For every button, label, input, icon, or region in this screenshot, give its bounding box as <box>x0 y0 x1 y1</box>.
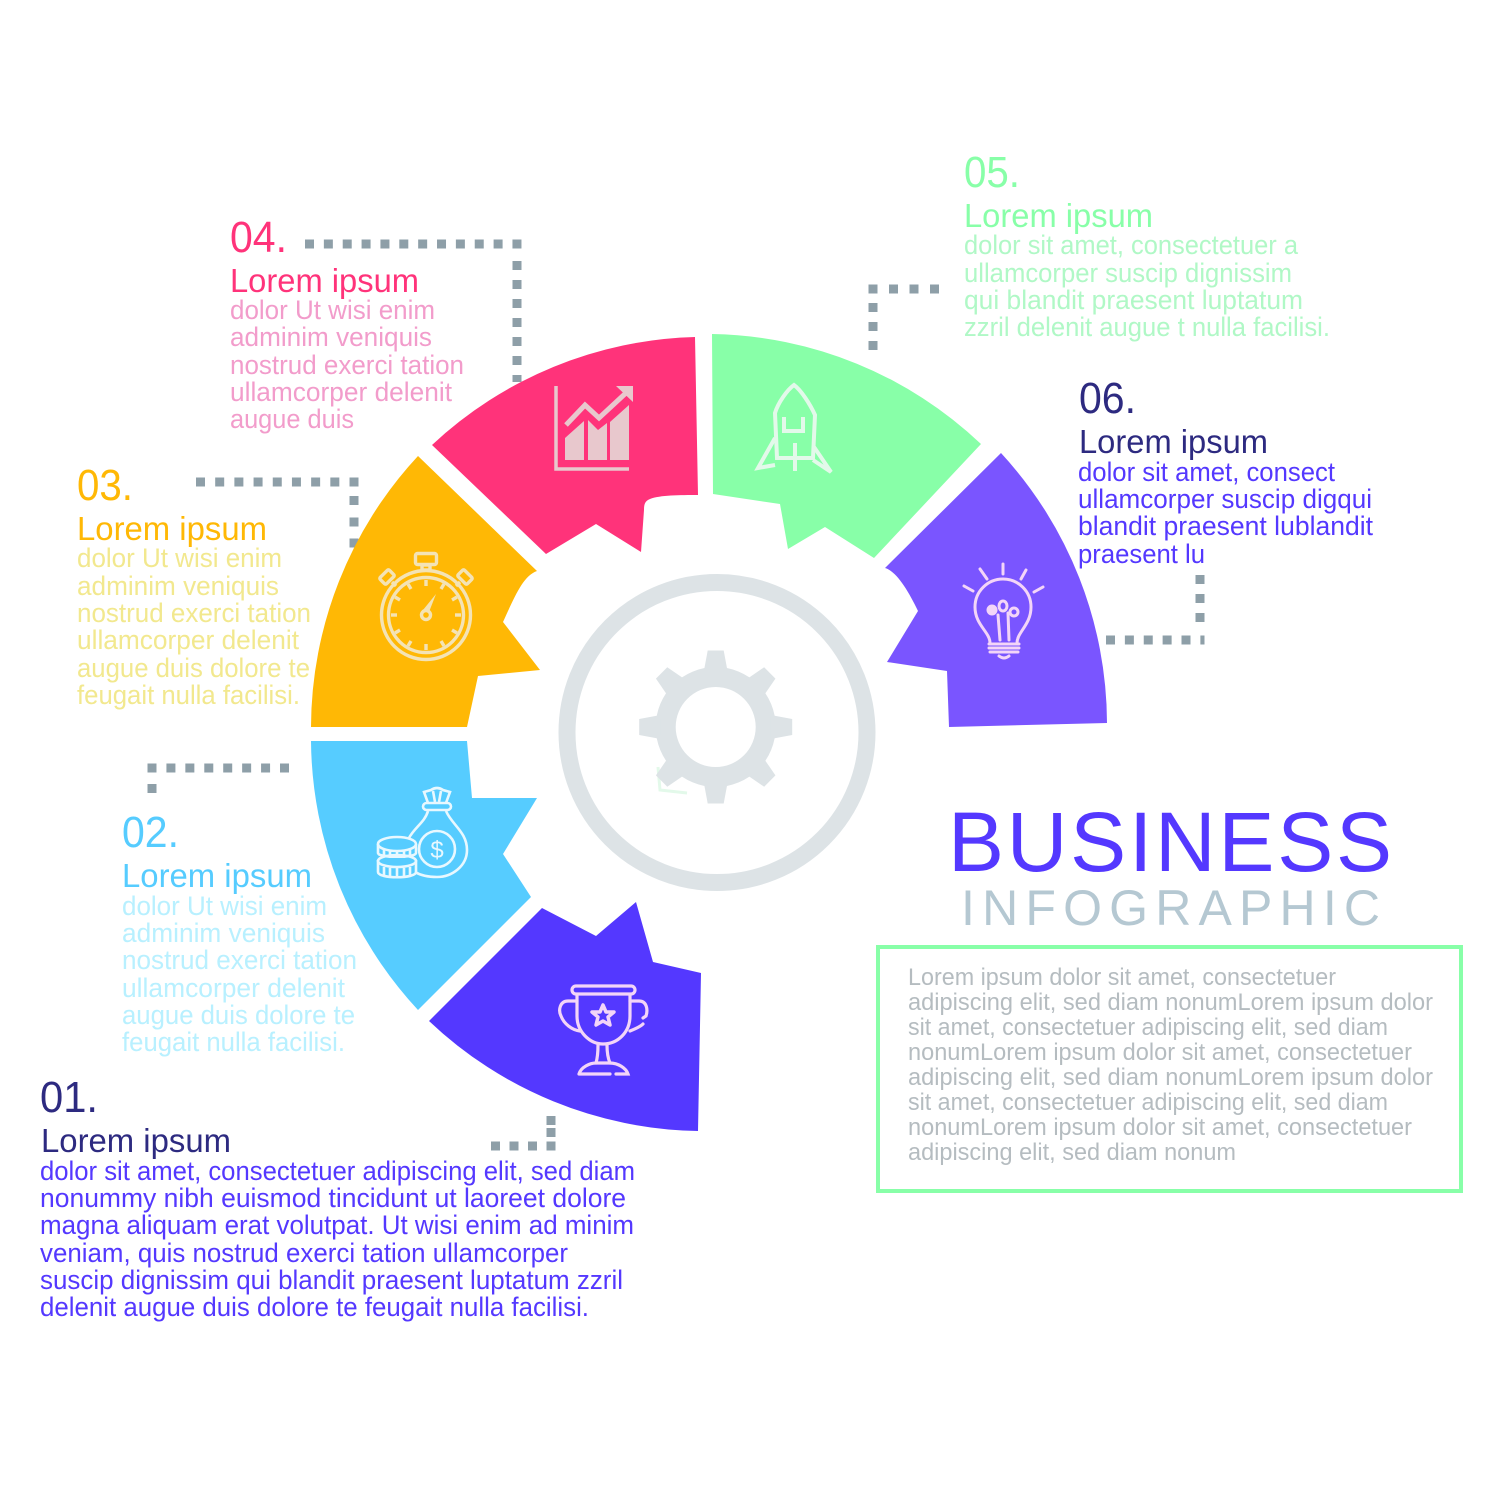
connector: 01 <box>491 1116 556 1146</box>
text block 02: feugait nulla facilisi. <box>122 1027 345 1057</box>
text block 01: delenit augue duis dolore te feugait nulla facilisi. <box>40 1292 589 1322</box>
text block 01: Lorem ipsum <box>41 1122 231 1159</box>
panel: description box: adipiscing elit, sed diam nonum <box>908 1139 1236 1166</box>
text block 04: dolor Ut wisi enim <box>230 295 435 325</box>
text block 06: Lorem ipsum <box>1079 423 1268 460</box>
panel: description box: nonumLorem ipsum dolor sit amet, consectetuer <box>908 1114 1412 1141</box>
text block 02: ullamcorper delenit <box>122 973 345 1003</box>
text block 06: ullamcorper suscip digqui <box>1078 484 1372 514</box>
segment 01: indigo <box>429 902 701 1131</box>
segment 05: mint <box>712 334 981 558</box>
text block 05: ullamcorper suscip dignissim <box>964 258 1292 288</box>
connector: 05 <box>868 289 939 350</box>
text block 04: augue duis <box>230 404 354 434</box>
title: BUSINESS <box>948 795 1392 889</box>
icon: center gear <box>639 650 792 804</box>
small mint mark <box>658 767 687 793</box>
connector: 03 <box>196 482 358 548</box>
text block 01: 01. <box>40 1073 98 1122</box>
text block 05: zzril delenit augue t nulla facilisi. <box>964 312 1330 342</box>
panel: description box: sit amet, consectetuer adipiscing elit, sed diam <box>908 1089 1388 1116</box>
text block 06: dolor sit amet, consect <box>1078 457 1335 487</box>
text block 03: dolor Ut wisi enim <box>77 543 282 573</box>
text block 04: Lorem ipsum <box>230 262 419 299</box>
text block 02: Lorem ipsum <box>122 857 312 894</box>
text block 01: dolor sit amet, consectetuer adipiscing elit, sed diam <box>40 1156 635 1186</box>
text block 05: qui blandit praesent luptatum <box>964 285 1303 315</box>
text block 03: augue duis dolore te <box>77 653 310 683</box>
panel: description box: adipiscing elit, sed diam nonumLorem ipsum dolor <box>908 1064 1433 1091</box>
segment 04: pink <box>432 337 698 554</box>
icon: stopwatch <box>379 554 473 660</box>
text block 01 <box>40 1073 635 1322</box>
text block 03: nostrud exerci tation <box>77 598 311 628</box>
text block 05: dolor sit amet, consectetuer a <box>964 230 1299 260</box>
icon: money bag and coins: $ <box>430 837 444 864</box>
text block 01: veniam, quis nostrud exerci tation ullamcorper <box>40 1238 568 1268</box>
text block 02: adminim veniquis <box>122 918 325 948</box>
connector: 06 <box>1106 575 1204 640</box>
segment 03: amber <box>311 456 540 727</box>
text block 05 <box>964 148 1330 342</box>
text block 02 <box>122 808 357 1057</box>
text block 04: adminim veniquis <box>230 322 432 352</box>
panel: description box: Lorem ipsum dolor sit amet, consectetuer <box>908 964 1336 991</box>
text block 02: 02. <box>122 808 179 857</box>
text block 03: feugait nulla facilisi. <box>77 680 300 710</box>
text block 02: nostrud exerci tation <box>122 945 357 975</box>
subtitle: INFOGRAPHIC <box>961 880 1380 936</box>
text block 04 <box>230 213 464 434</box>
text block 06: blandit praesent lublandit <box>1078 511 1373 541</box>
text block 03 <box>77 461 311 710</box>
text block 01: magna aliquam erat volutpat. Ut wisi enim ad minim <box>40 1210 634 1240</box>
text block 05: 05. <box>964 148 1020 197</box>
text block 02: dolor Ut wisi enim <box>122 891 327 921</box>
icon: growth chart <box>556 386 633 469</box>
text block 01: suscip dignissim qui blandit praesent luptatum zzril <box>40 1265 623 1295</box>
text block 01: nonummy nibh euismod tincidunt ut laoreet dolore <box>40 1183 626 1213</box>
text block 03: Lorem ipsum <box>77 510 267 547</box>
text block 02: augue duis dolore te <box>122 1000 355 1030</box>
icon: rocket <box>758 385 831 472</box>
panel: description box: adipiscing elit, sed diam nonumLorem ipsum dolor <box>908 989 1433 1016</box>
center ring <box>567 582 867 882</box>
text block 04: 04. <box>230 213 287 262</box>
text block 03: 03. <box>77 461 133 510</box>
text block 06: praesent lu <box>1078 539 1205 569</box>
panel: description box: sit amet, consectetuer adipiscing elit, sed diam <box>908 1014 1388 1041</box>
panel: description box <box>878 947 1461 1191</box>
text block 03: adminim veniquis <box>77 571 279 601</box>
icon: light bulb <box>964 564 1043 658</box>
panel: description box: nonumLorem ipsum dolor sit amet, consectetuer <box>908 1039 1412 1066</box>
text block 06 <box>1078 374 1373 569</box>
text block 06: 06. <box>1079 374 1136 423</box>
text block 04: ullamcorper delenit <box>230 377 452 407</box>
text block 05: Lorem ipsum <box>964 197 1153 234</box>
segment 06: violet <box>885 453 1107 727</box>
segment 02: sky blue <box>311 741 537 1010</box>
connector: 04 <box>305 244 522 382</box>
icon: money bag and coins <box>378 788 467 877</box>
text block 03: ullamcorper delenit <box>77 625 299 655</box>
icon: trophy <box>560 986 647 1074</box>
connector: 02 <box>148 768 289 793</box>
text block 04: nostrud exerci tation <box>230 350 464 380</box>
